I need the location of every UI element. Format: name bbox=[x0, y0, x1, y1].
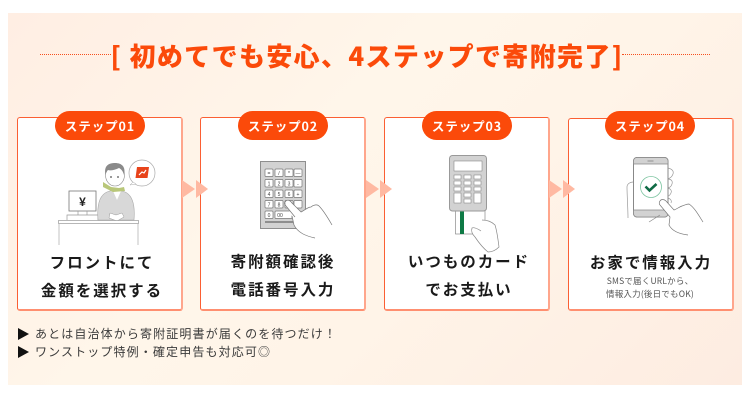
panel: step 2 card bbox=[200, 117, 366, 311]
icon: phone keypad with hand bbox=[260, 161, 332, 238]
panel: step 4 card bbox=[568, 118, 734, 311]
step 3 label bbox=[408, 250, 530, 300]
title: [ 初めてでも安心、4ステップで寄附完了] bbox=[111, 37, 623, 74]
icon: staff at front desk bbox=[58, 160, 156, 245]
step badge 04 bbox=[605, 111, 695, 140]
icon: phone keypad with hand: 1 bbox=[268, 182, 271, 188]
note 1: あとは自治体から寄附証明書が届くのを待つだけ！ bbox=[35, 325, 337, 342]
icon: phone keypad with hand: 00 bbox=[277, 213, 283, 219]
step 1 label: フロントにて bbox=[50, 251, 154, 273]
icon: phone keypad with hand: - bbox=[297, 182, 299, 188]
step 2 label: 電話番号入力 bbox=[231, 278, 335, 300]
icon: phone keypad with hand: 6 bbox=[288, 192, 291, 198]
note 2: ワンストップ特例・確定申告も対応可◎ bbox=[35, 343, 271, 360]
step badge 01: ステップ01 bbox=[65, 116, 135, 135]
step 2 label: 寄附額確認後 bbox=[231, 250, 335, 272]
icon: phone keypad with hand: 8 bbox=[278, 202, 281, 208]
icon: phone keypad with hand: / bbox=[278, 171, 280, 177]
step 2 label bbox=[231, 250, 335, 300]
step 4 label: お家で情報入力 bbox=[590, 251, 712, 273]
arrow: step 3 to 4 bbox=[549, 180, 575, 198]
icon: staff at front desk: ¥ bbox=[79, 195, 86, 209]
step 4 sub text: SMSで届くURLから、 bbox=[607, 275, 693, 287]
arrow: step 2 to 3 bbox=[366, 180, 392, 198]
icon: phone keypad with hand: + bbox=[297, 192, 300, 198]
step 4 sub text bbox=[606, 275, 694, 300]
step badge 01 bbox=[55, 111, 145, 140]
icon: phone keypad with hand: = bbox=[268, 171, 271, 177]
icon: card terminal with hand bbox=[449, 155, 500, 252]
icon: phone keypad with hand: — bbox=[296, 171, 300, 177]
step 1 label bbox=[41, 251, 163, 300]
step badge 04: ステップ04 bbox=[615, 116, 685, 135]
icon: phone keypad with hand: 0 bbox=[268, 213, 271, 219]
arrow: step 1 to 2 bbox=[182, 180, 208, 198]
step badge 02: ステップ02 bbox=[248, 116, 318, 135]
step badge 02 bbox=[238, 111, 328, 140]
step badge 03 bbox=[422, 111, 512, 140]
step 1 label: 金額を選択する bbox=[41, 278, 163, 300]
step 3 label: いつものカード bbox=[408, 250, 530, 272]
icon: phone keypad with hand: * bbox=[288, 171, 290, 177]
step badge 03: ステップ03 bbox=[432, 116, 502, 135]
icon: smartphone with check mark bbox=[626, 157, 704, 236]
icon: phone keypad with hand: 7 bbox=[268, 202, 271, 208]
step 3 label: でお支払い bbox=[425, 278, 513, 300]
icon: phone keypad with hand: 3 bbox=[288, 182, 291, 188]
panel: step 1 card bbox=[17, 117, 183, 311]
panel: step 3 card bbox=[384, 117, 550, 311]
icon: phone keypad with hand: 2 bbox=[278, 182, 281, 188]
icon: phone keypad with hand: 5 bbox=[278, 192, 281, 198]
icon: phone keypad with hand: 4 bbox=[268, 192, 271, 198]
step 4 sub text: 情報入力(後日でもOK) bbox=[606, 288, 694, 300]
